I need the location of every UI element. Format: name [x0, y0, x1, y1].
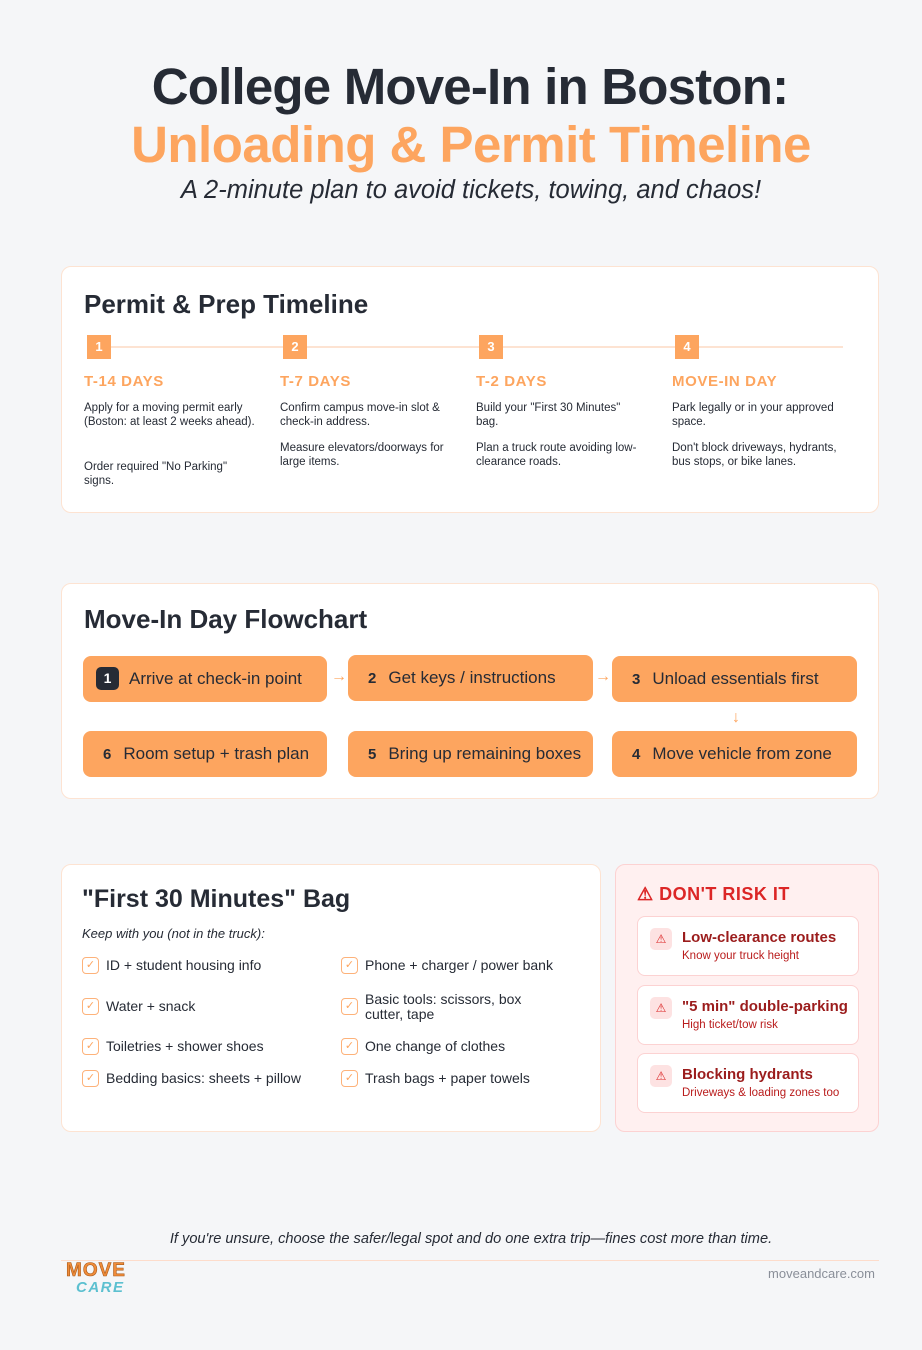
checklist: ✓: [86, 1040, 95, 1052]
card 3: ⚠: [656, 1069, 666, 1083]
step 2: Measure elevators/doorways for: [280, 442, 444, 454]
step 4: Don't block driveways, hydrants,: [672, 442, 837, 454]
step 3: Plan a truck route avoiding low-: [476, 442, 636, 454]
step 4: space.: [672, 416, 706, 428]
checklist: ✓: [345, 959, 354, 971]
box 1: 1: [104, 670, 111, 686]
box 6: [83, 731, 327, 777]
step 4: 4: [683, 339, 691, 354]
step 4: [672, 335, 837, 468]
checklist: Water + snack: [106, 998, 195, 1014]
card 2: "5 min" double-parking: [682, 998, 848, 1015]
box 2: [348, 655, 593, 701]
checklist: [82, 957, 553, 1087]
step 4: Park legally or in your approved: [672, 402, 834, 414]
box 1: Arrive at check-in point: [129, 669, 302, 688]
checklist: Phone + charger / power bank: [365, 957, 553, 973]
box 4: 4: [632, 746, 640, 763]
checklist: Bedding basics: sheets + pillow: [106, 1070, 301, 1086]
box 6: Room setup + trash plan: [123, 744, 309, 763]
step 2: [280, 335, 444, 468]
step 1: 1: [95, 339, 103, 354]
step 4: MOVE-IN DAY: [672, 373, 777, 390]
checklist: Toiletries + shower shoes: [106, 1038, 264, 1054]
arrow: →: [331, 668, 347, 685]
card 2: ⚠: [656, 1001, 666, 1015]
card 3: Driveways & loading zones too: [682, 1087, 839, 1099]
checklist: ✓: [345, 1040, 354, 1052]
checklist: Basic tools: scissors, box cutter, tape: [365, 991, 521, 1022]
step 1: T-14 DAYS: [84, 373, 164, 390]
step 2: check-in address.: [280, 416, 370, 428]
box 1: [83, 656, 327, 702]
box 5: Bring up remaining boxes: [388, 744, 581, 763]
box 4: [612, 731, 857, 777]
checklist: Trash bags + paper towels: [365, 1070, 530, 1086]
heading: Move-In Day Flowchart: [84, 604, 367, 634]
checklist: ✓: [86, 959, 95, 971]
logo: MOVE: [66, 1260, 126, 1281]
step 2: 2: [291, 339, 299, 354]
footer note: If you're unsure, choose the safer/legal spot and do one extra trip—fines cost more than time.: [170, 1231, 772, 1247]
step 2: large items.: [280, 456, 339, 468]
box 2: 2: [368, 670, 376, 687]
card 3: [637, 1053, 859, 1113]
arrow: →: [595, 668, 611, 685]
heading: "First 30 Minutes" Bag: [82, 885, 350, 913]
subtitle: A 2-minute plan to avoid tickets, towing, and chaos!: [181, 176, 761, 204]
box 2: Get keys / instructions: [388, 668, 556, 687]
panel: permit timeline: [61, 266, 879, 513]
checklist: ✓: [345, 1000, 354, 1012]
panel: flowchart: [61, 583, 879, 799]
title: Unloading & Permit Timeline: [131, 116, 811, 173]
step 2: T-7 DAYS: [280, 373, 351, 390]
logo: [66, 1260, 126, 1296]
step 3: clearance roads.: [476, 456, 561, 468]
website: moveandcare.com: [768, 1266, 875, 1281]
step 1: Order required "No Parking": [84, 461, 227, 473]
step 3: T-2 DAYS: [476, 373, 547, 390]
step 3: Build your "First 30 Minutes": [476, 402, 620, 414]
subtitle: Keep with you (not in the truck):: [82, 926, 265, 941]
box 3: [612, 656, 857, 702]
box 3: 3: [632, 671, 640, 688]
step 2: Confirm campus move-in slot &: [280, 402, 440, 414]
box 5: 5: [368, 746, 376, 763]
step 3: [476, 335, 636, 468]
step 3: 3: [487, 339, 495, 354]
card 2: [637, 985, 859, 1045]
checklist: ✓: [86, 1072, 95, 1084]
card 1: Know your truck height: [682, 950, 799, 962]
heading: Permit & Prep Timeline: [84, 289, 368, 319]
checklist: ✓: [86, 1000, 95, 1012]
box 4: Move vehicle from zone: [652, 744, 832, 763]
checklist: One change of clothes: [365, 1038, 505, 1054]
step 1: signs.: [84, 475, 114, 487]
card 1: ⚠: [656, 932, 666, 946]
checklist: ID + student housing info: [106, 957, 261, 973]
box 3: Unload essentials first: [652, 669, 819, 688]
arrow down: ↓: [732, 709, 740, 726]
title: College Move-In in Boston:: [152, 58, 788, 115]
title: [131, 58, 811, 173]
box 5: [348, 731, 593, 777]
step 1: Apply for a moving permit early: [84, 402, 243, 414]
card 3: Blocking hydrants: [682, 1066, 813, 1083]
heading: ⚠ DON'T RISK IT: [637, 884, 790, 904]
card 1: Low-clearance routes: [682, 929, 836, 946]
box 6: 6: [103, 746, 111, 763]
step 1: (Boston: at least 2 weeks ahead).: [84, 416, 255, 428]
step 3: bag.: [476, 416, 498, 428]
logo: CARE: [76, 1279, 125, 1296]
step 4: bus stops, or bike lanes.: [672, 456, 796, 468]
panel: don't risk it: [615, 864, 879, 1132]
step 1: [84, 335, 255, 487]
card 1: [637, 916, 859, 976]
card 2: High ticket/tow risk: [682, 1019, 778, 1031]
panel: first 30 minutes bag: [61, 864, 601, 1132]
checklist: ✓: [345, 1072, 354, 1084]
